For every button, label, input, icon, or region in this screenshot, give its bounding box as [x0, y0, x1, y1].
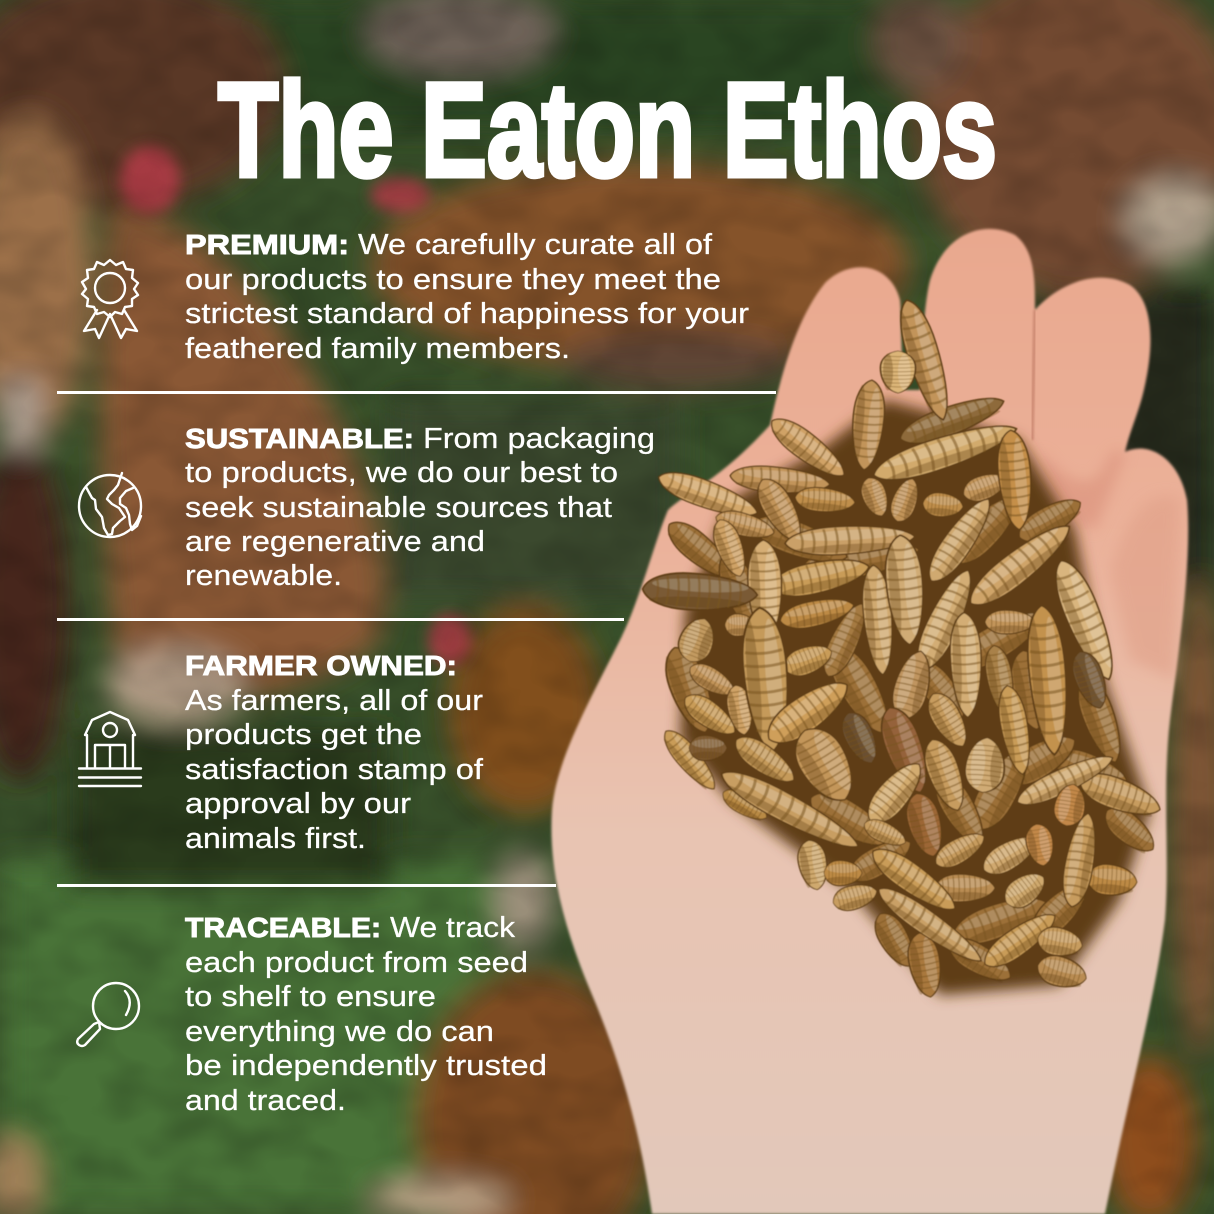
text block: traceable: to shelf to ensure [185, 981, 436, 1013]
text block: traceable: each product from seed [185, 947, 528, 979]
text block: premium: strictest standard of happiness for your [185, 298, 749, 330]
icon: award ribbon [82, 260, 138, 338]
text block: farmer owned: products get the [185, 719, 422, 751]
text block: premium [185, 229, 749, 365]
text block: sustainable [185, 423, 655, 592]
icon: globe [79, 473, 141, 537]
text block: premium: our products to ensure they meet the [185, 264, 721, 296]
text block: sustainable: From packaging [423, 423, 655, 455]
text block: farmer owned: satisfaction stamp of [185, 754, 484, 786]
text block: sustainable: to products, we do our best to [185, 457, 618, 489]
text block: sustainable: seek sustainable sources that [185, 492, 612, 524]
text block: farmer owned: FARMER OWNED: [185, 650, 457, 681]
icon: magnifying glass [77, 983, 139, 1046]
text block: traceable: We track [390, 912, 516, 944]
text block: farmer owned [185, 650, 484, 855]
text block: sustainable: renewable. [185, 560, 342, 592]
hand [551, 229, 1188, 1214]
text block: premium: PREMIUM: [185, 229, 349, 260]
text block: traceable: be independently trusted [185, 1050, 547, 1082]
text block: farmer owned: As farmers, all of our [185, 685, 483, 717]
divider lines [57, 391, 776, 887]
text block: farmer owned: approval by our [185, 788, 411, 820]
pile of dried grubs [642, 296, 1165, 1000]
text block: premium: We carefully curate all of [358, 229, 713, 261]
text block: traceable [185, 912, 547, 1117]
text block: traceable: TRACEABLE: [185, 912, 381, 943]
text block: sustainable: SUSTAINABLE: [185, 423, 414, 454]
text block: traceable: everything we do can [185, 1016, 494, 1048]
text block: sustainable: are regenerative and [185, 526, 485, 558]
text block: premium: feathered family members. [185, 333, 570, 365]
icon: barn [79, 712, 141, 786]
text block: traceable: and traced. [185, 1085, 346, 1117]
text block: farmer owned: animals first. [185, 823, 366, 855]
